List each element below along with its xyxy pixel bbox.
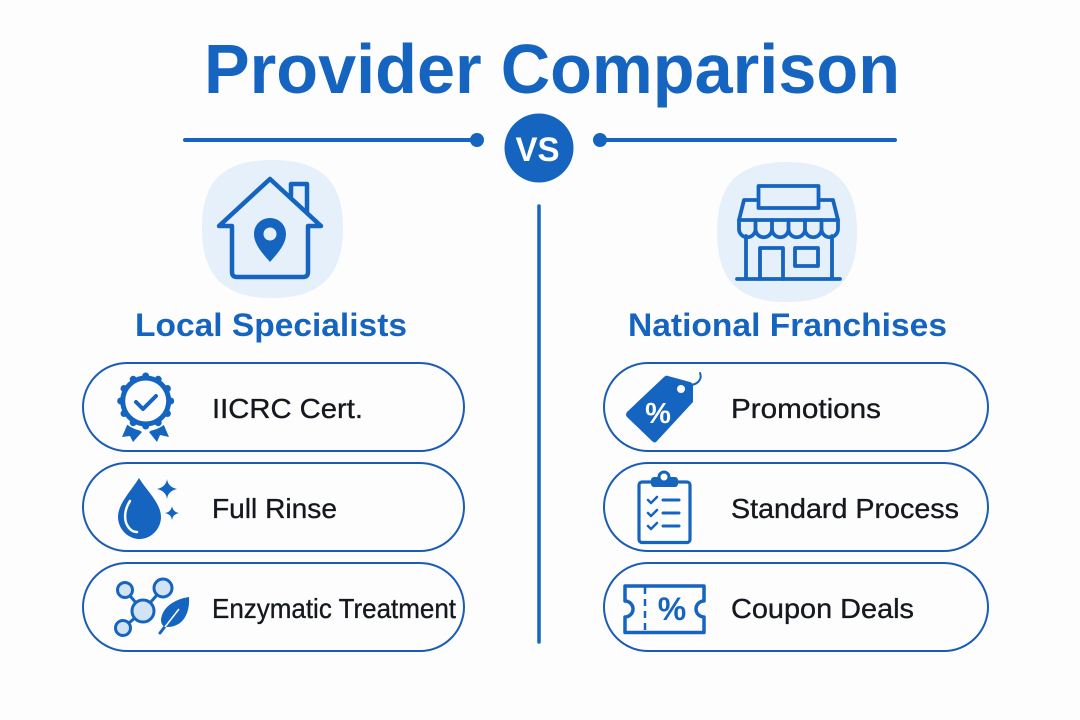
icon: coupon ticket	[625, 586, 704, 632]
icon: molecule and leaf	[116, 579, 189, 636]
row: Full Rinse	[83, 463, 464, 551]
label: IICRC Cert.	[212, 393, 363, 424]
icon: house with location pin	[202, 160, 343, 298]
heading: national franchises: National Franchises	[628, 307, 947, 343]
icon: storefront	[717, 162, 857, 302]
label: Enzymatic Treatment	[212, 593, 456, 624]
icon: price tag: %	[645, 398, 671, 430]
icon: price tag	[626, 373, 701, 442]
title: Provider Comparison	[204, 30, 900, 108]
VS badge	[504, 114, 574, 182]
VS badge: VS	[516, 131, 560, 169]
row: Enzymatic Treatment	[83, 563, 464, 651]
right divider line	[593, 133, 895, 147]
icon: clipboard checklist	[639, 472, 690, 542]
icon: certification rosette	[116, 371, 176, 442]
panel: local specialists	[83, 160, 464, 651]
icon: coupon ticket: %	[658, 591, 686, 627]
row: Coupon Deals	[604, 563, 988, 651]
vertical center divider	[537, 206, 541, 642]
row: IICRC Cert.	[83, 363, 464, 451]
label: Standard Process	[731, 493, 959, 524]
label: Coupon Deals	[731, 593, 914, 624]
heading: local specialists: Local Specialists	[135, 307, 407, 343]
label: Full Rinse	[212, 493, 337, 524]
icon: water drop with sparkles	[118, 478, 179, 539]
row: Standard Process	[604, 463, 988, 551]
row: Promotions	[604, 363, 988, 451]
label: Promotions	[731, 393, 881, 424]
left divider line	[185, 133, 484, 147]
panel: national franchises	[604, 162, 988, 651]
